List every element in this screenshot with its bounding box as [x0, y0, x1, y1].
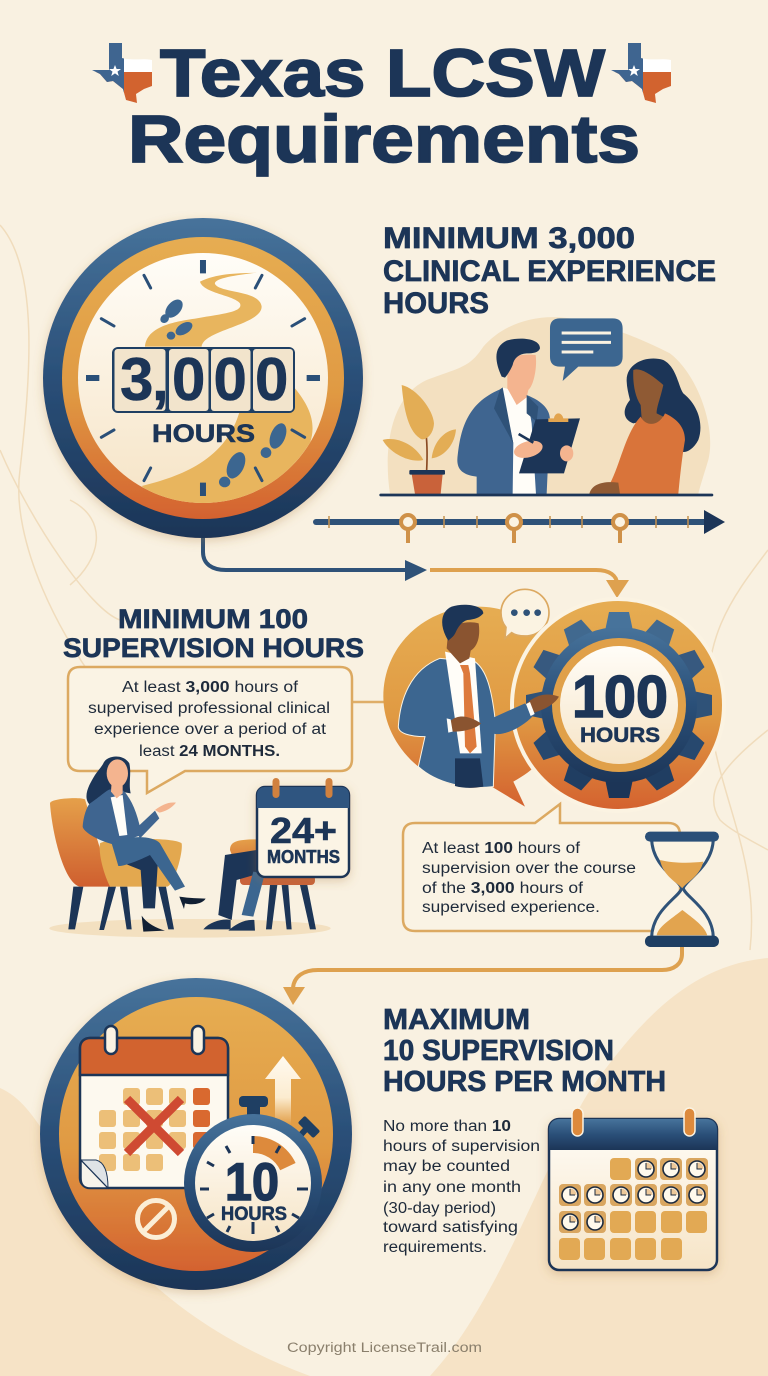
- speech bubble: dots: [501, 589, 549, 638]
- icon: calendar 24+ months: 24+: [270, 810, 337, 851]
- icon: up arrow: [265, 1056, 301, 1125]
- heading: maximum 10: MAXIMUM: [383, 1004, 530, 1036]
- title: Texas LCSW: [160, 36, 606, 111]
- clock ticks: [86, 260, 320, 496]
- icon: texas flag right: [611, 43, 671, 103]
- heading: minimum 3,000: [383, 222, 716, 320]
- clock rings: [43, 218, 363, 538]
- icon: calendar with clocks: [549, 1108, 717, 1270]
- text: monthly limit: No more than 10: [383, 1118, 511, 1135]
- stopwatch label 10: 10: [225, 1153, 279, 1212]
- heading: minimum 100: MINIMUM 100: [118, 604, 308, 634]
- text: monthly limit: [383, 1118, 540, 1256]
- heading: minimum 3,000: MINIMUM 3,000: [383, 222, 635, 255]
- callout: 100 hours of supervision: [403, 804, 680, 931]
- callout: 3,000 hours over 24 months: supervised professional clinical: [88, 700, 330, 717]
- text: monthly limit: may be counted: [383, 1158, 510, 1175]
- clock: 3,000 hours: [43, 218, 363, 538]
- presenter: [398, 605, 495, 788]
- left chair: [50, 798, 182, 930]
- callout: 100 hours of supervision: of the 3,000 hours of: [422, 880, 584, 897]
- callout: 100 hours of supervision: supervision over the course: [422, 860, 636, 877]
- circle: 10 hours limit: [40, 978, 352, 1290]
- heading: minimum 100: SUPERVISION HOURS: [63, 633, 364, 663]
- winding road and footsteps: [86, 260, 320, 508]
- presenter arm pointing at gear: [492, 695, 559, 734]
- icon: prohibition: [138, 1200, 174, 1238]
- arrow: navy connector from clock: [203, 536, 427, 581]
- text: monthly limit: in any one month: [383, 1179, 521, 1196]
- desk line: [379, 494, 713, 496]
- text: monthly limit: (30-day period): [383, 1200, 496, 1217]
- plant: [383, 385, 456, 494]
- speech bubble: [550, 318, 623, 381]
- text: monthly limit: hours of supervision: [383, 1138, 540, 1155]
- gear label hours: HOURS: [580, 724, 660, 747]
- icon: texas flag left: [92, 43, 152, 103]
- illustration: counselling session: [49, 756, 331, 938]
- copyright: Copyright LicenseTrail.com: [287, 1340, 482, 1355]
- text: monthly limit: toward satisfying: [383, 1219, 518, 1236]
- heading: maximum 10: 10 SUPERVISION: [383, 1035, 614, 1067]
- stopwatch ticks: [200, 1136, 308, 1234]
- heading: minimum 3,000: CLINICAL EXPERIENCE: [383, 255, 716, 288]
- client woman: [589, 359, 700, 494]
- icon: calendar 24+ months: [257, 778, 349, 877]
- gear teeth: [526, 612, 712, 798]
- illustration: supervisor and client: [379, 317, 713, 496]
- heading: maximum 10: [383, 1004, 666, 1098]
- heading: maximum 10: HOURS PER MONTH: [383, 1066, 666, 1098]
- seated woman: [83, 756, 206, 932]
- arrow: tan connector to gear: [430, 570, 629, 598]
- callout: 3,000 hours over 24 months: [68, 667, 390, 793]
- timeline pins: [401, 515, 627, 543]
- heading: minimum 100: [63, 604, 364, 663]
- icon: calendar 24+ months: MONTHS: [267, 847, 340, 867]
- arrow: tan connector to bottom circle: [283, 945, 682, 1005]
- text: monthly limit: requirements.: [383, 1239, 487, 1256]
- callout: 3,000 hours over 24 months: At least 3,000 hours of: [122, 679, 299, 696]
- circle rings: [40, 978, 352, 1290]
- man with clipboard: [457, 339, 580, 494]
- stopwatch label hours: HOURS: [221, 1204, 287, 1225]
- icon: crossed calendar: [80, 1026, 228, 1188]
- timeline arrow: [313, 510, 725, 543]
- title: Requirements: [128, 102, 640, 177]
- callout: 100 hours of supervision: supervised experience.: [422, 899, 600, 916]
- gear label 100: 100: [572, 664, 668, 730]
- clock label hours: HOURS: [152, 420, 255, 448]
- callout: 3,000 hours over 24 months: least 24 MONTHS.: [139, 743, 280, 760]
- illustration: man presenting on orange bubble: [383, 589, 568, 807]
- icon: hourglass: [645, 832, 719, 947]
- stopwatch: [184, 1096, 322, 1252]
- callout: 3,000 hours over 24 months: experience over a period of at: [94, 721, 327, 738]
- callout: 100 hours of supervision: At least 100 hours of: [422, 840, 581, 857]
- heading: minimum 3,000: HOURS: [383, 287, 489, 320]
- right chair and client legs: [203, 839, 316, 931]
- counter 3,000: 3,000: [120, 346, 288, 413]
- title: [128, 36, 640, 177]
- gear: 100 hours: [510, 597, 726, 813]
